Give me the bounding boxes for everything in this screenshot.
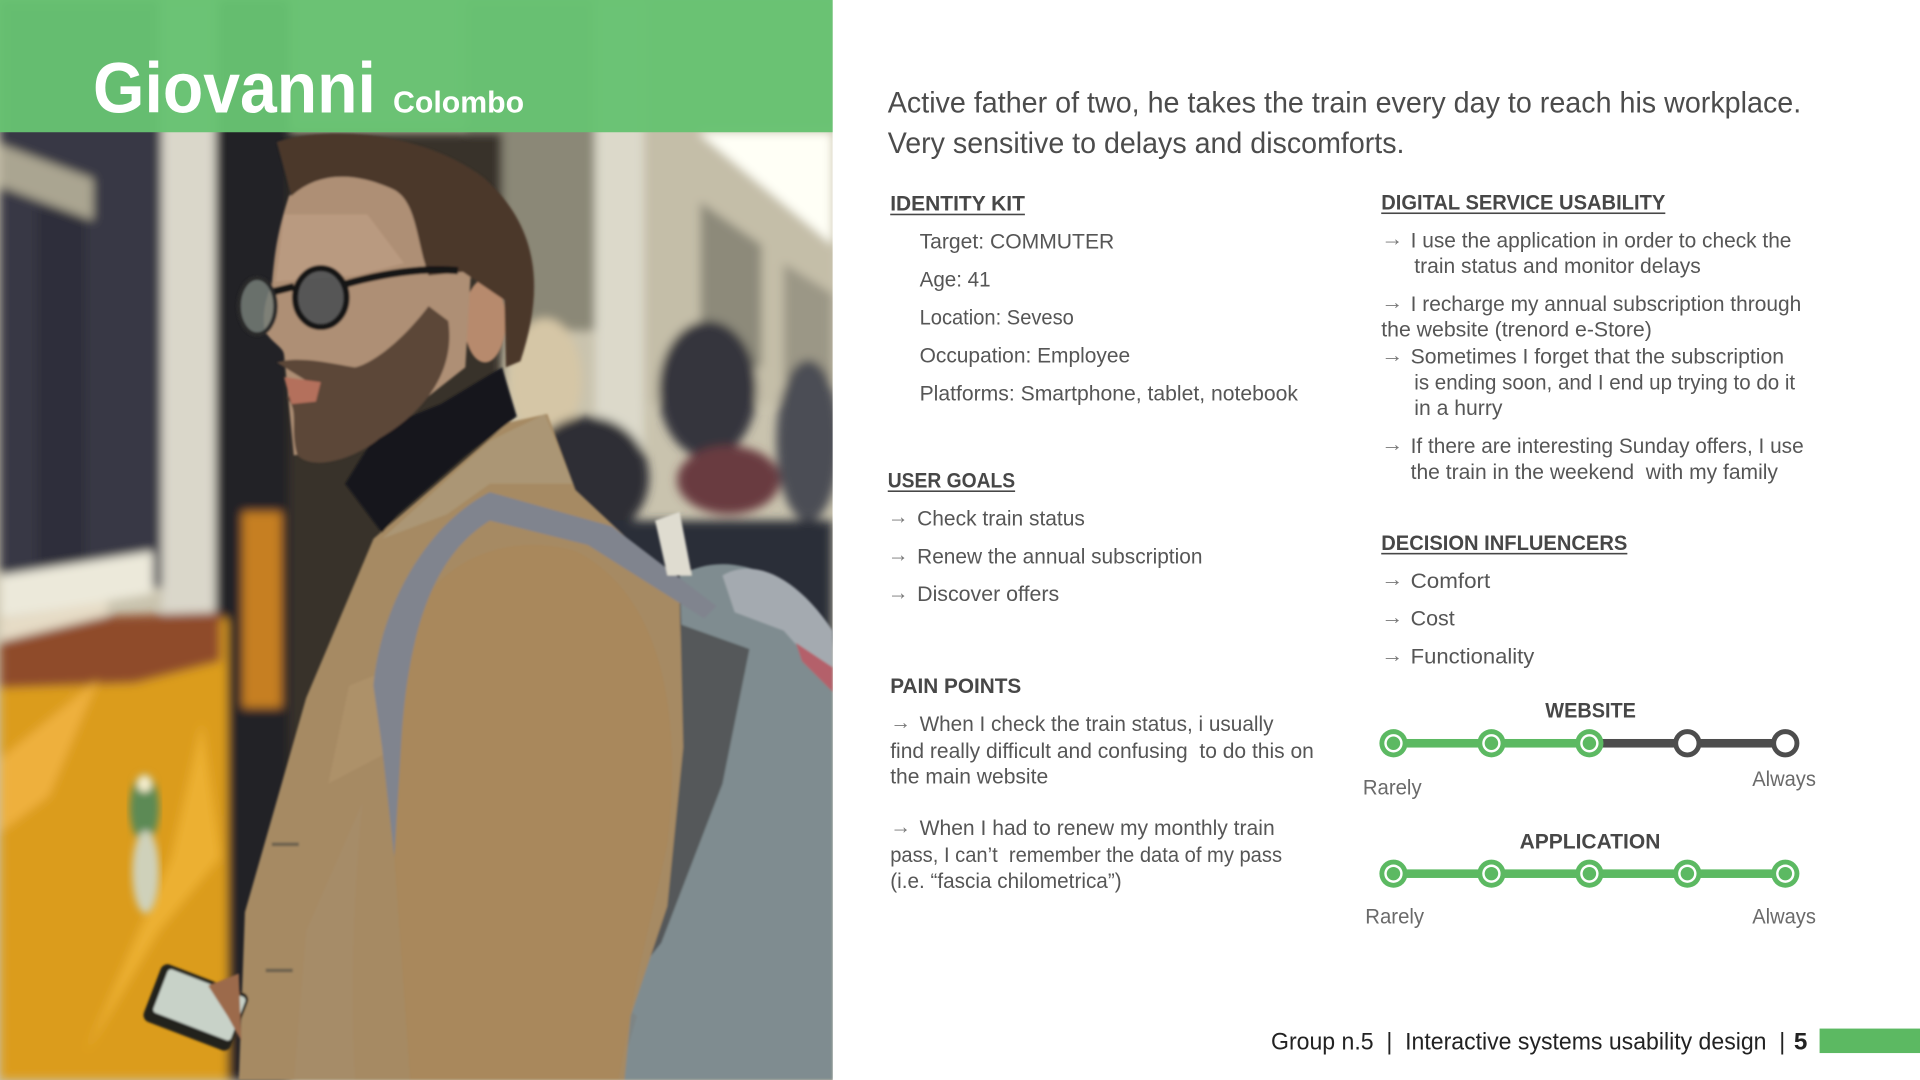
panel: pain points: → (890, 815, 911, 838)
heading: digital service usability: DIGITAL SERVICE USABILITY (1381, 191, 1665, 214)
panel: identity kit: Occupation: Employee (920, 344, 1130, 367)
panel: digital service usability: → (1381, 228, 1403, 251)
panel: digital service usability: the train in the weekend with my family (1411, 461, 1779, 484)
intro text (888, 87, 1801, 160)
panel: decision influencers: Functionality (1411, 646, 1535, 669)
panel: user goals: → (888, 581, 909, 604)
panel: digital service usability: If there are interesting Sunday offers, I use (1411, 435, 1804, 458)
heading: pain points: PAIN POINTS (890, 675, 1021, 698)
panel: pain points: → (890, 711, 911, 734)
rating scale: application (1365, 831, 1816, 928)
panel: user goals: Renew the annual subscription (917, 545, 1202, 568)
panel: pain points: the main website (890, 766, 1048, 789)
panel: digital service usability: the website (trenord e-Store) (1381, 319, 1652, 342)
turtleneck (345, 367, 517, 533)
panel: identity kit: Age: 41 (920, 269, 991, 292)
panel: digital service usability: I use the application in order to check the (1411, 229, 1791, 252)
hair (277, 134, 534, 367)
rating scale: application: Always (1752, 905, 1816, 928)
panel: decision influencers: Cost (1411, 608, 1455, 631)
footer: 5 (1794, 1028, 1807, 1055)
panel: user goals: Discover offers (917, 583, 1059, 606)
panel: pain points: pass, I can’t remember the data of my pass (890, 844, 1282, 867)
panel: identity kit: Target: COMMUTER (920, 231, 1114, 254)
panel: pain points: find really difficult and confusing to do this on (890, 740, 1314, 763)
panel: decision influencers: → (1381, 568, 1403, 591)
title: Giovanni Colombo: Colombo (393, 86, 524, 120)
panel: identity kit: Platforms: Smartphone, tablet, notebook (920, 382, 1299, 405)
rating scale: website (1363, 700, 1816, 800)
rating scale: website: Always (1752, 768, 1816, 791)
panel: decision influencers: Comfort (1411, 570, 1490, 593)
footer: Group n.5 | Interactive systems usability design | (1271, 1028, 1785, 1055)
shoulder strap (372, 492, 682, 854)
rating scale: application: APPLICATION (1520, 831, 1660, 854)
panel: digital service usability: Sometimes I forget that the subscription (1411, 346, 1784, 369)
glasses (239, 268, 458, 334)
rating scale: website: Rarely (1363, 777, 1422, 800)
rating scale: website: WEBSITE (1545, 700, 1636, 723)
heading: identity kit: IDENTITY KIT (890, 193, 1025, 216)
panel: digital service usability (1381, 191, 1804, 484)
heading: decision influencers: DECISION INFLUENCERS (1381, 532, 1627, 555)
panel: decision influencers (1381, 532, 1627, 669)
coat (239, 414, 683, 1080)
panel: digital service usability: → (1381, 291, 1403, 314)
panel: user goals: → (888, 505, 909, 528)
panel: decision influencers: → (1381, 644, 1403, 667)
panel: digital service usability: I recharge my annual subscription through (1411, 293, 1801, 316)
panel: identity kit: Location: Seveso (920, 306, 1074, 329)
panel: pain points (890, 675, 1314, 893)
panel: user goals: Check train status (917, 507, 1085, 530)
panel: digital service usability: in a hurry (1414, 397, 1503, 420)
heading: user goals: USER GOALS (888, 469, 1015, 492)
panel: user goals (888, 469, 1202, 606)
lapel (382, 414, 573, 539)
green header band (0, 0, 833, 132)
ear (464, 279, 506, 362)
panel: digital service usability: train status and monitor delays (1414, 255, 1701, 278)
panel: user goals: → (888, 543, 909, 566)
panel: digital service usability: is ending soon, and I end up trying to do it (1414, 371, 1795, 394)
backpack (618, 564, 833, 1080)
phone (141, 962, 250, 1053)
photo: man with backpack beside a train (0, 0, 840, 1080)
panel: pain points: When I check the train status, i usually (920, 713, 1274, 736)
panel: decision influencers: → (1381, 606, 1403, 629)
panel: identity kit (890, 193, 1299, 405)
panel: digital service usability: → (1381, 433, 1403, 456)
panel: pain points: (i.e. “fascia chilometrica”) (890, 870, 1122, 893)
panel: pain points: When I had to renew my monthly train (920, 817, 1275, 840)
intro text: Active father of two, he takes the train every day to reach his workplace. (888, 87, 1801, 120)
rating scale: application: Rarely (1365, 905, 1425, 928)
face (264, 159, 471, 456)
intro text: Very sensitive to delays and discomforts. (888, 127, 1404, 160)
beard (277, 306, 449, 463)
panel: digital service usability: → (1381, 344, 1403, 367)
title: Giovanni Colombo: Giovanni (93, 50, 376, 129)
